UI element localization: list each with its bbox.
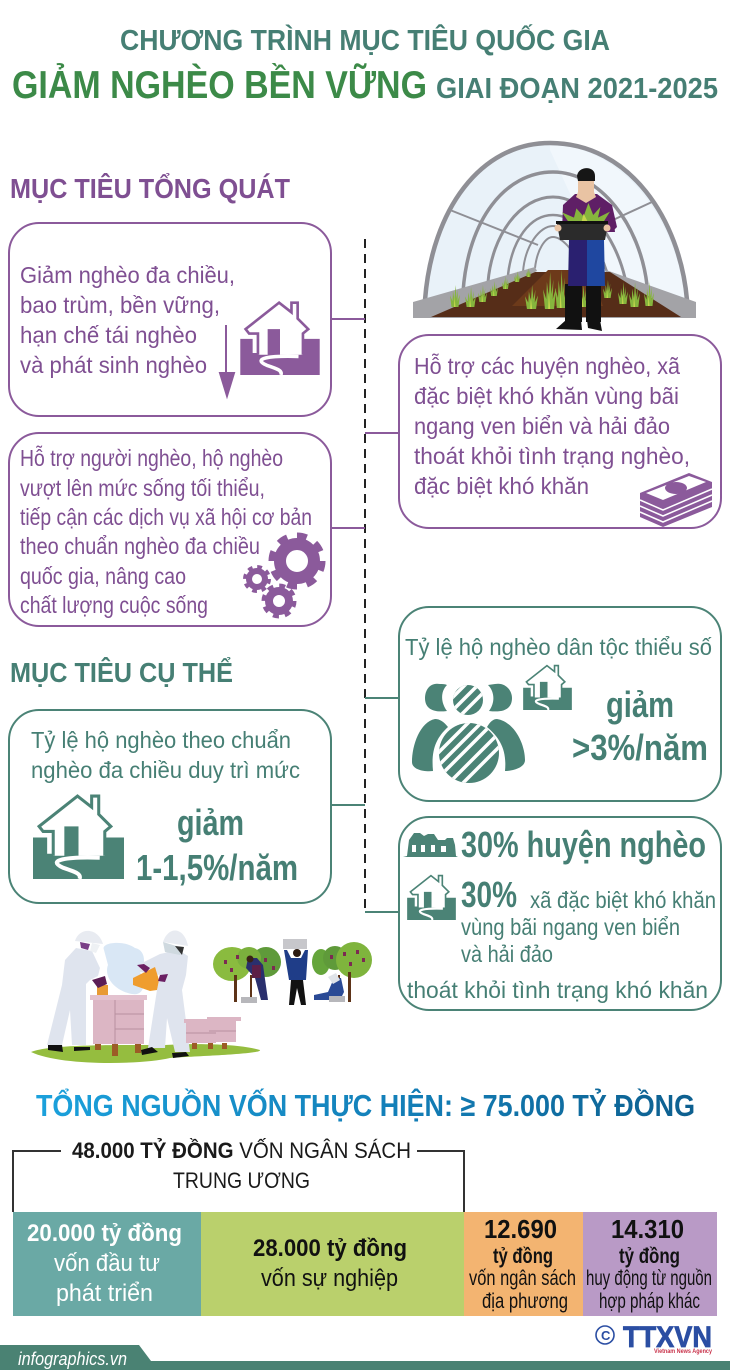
icon: gears	[245, 536, 322, 616]
panel: poverty rate target	[9, 710, 331, 903]
heading: specific objectives: MỤC TIÊU CỤ THỂ	[10, 657, 233, 688]
bar segment: local budget: 12.690	[484, 1214, 557, 1244]
bar segment: local budget: địa phương	[482, 1290, 568, 1313]
panel: poor districts target: và hải đảo	[461, 941, 553, 967]
panel: support poor districts: đặc biệt khó khăn vùng bãi	[414, 383, 679, 409]
panel: support poor districts: Hỗ trợ các huyện nghèo, xã	[414, 353, 681, 379]
panel: reduce poverty: Giảm nghèo đa chiều,	[20, 262, 235, 288]
panel: reduce poverty: bao trùm, bền vững,	[20, 292, 220, 318]
illustration: orchard workers	[213, 939, 372, 1005]
panel: poverty rate target: giảm	[177, 802, 244, 843]
icon: small house	[407, 876, 456, 920]
panel: support poor districts: ngang ven biển và hải đảo	[414, 413, 670, 439]
bar segment: local budget: vốn ngân sách	[469, 1267, 576, 1290]
panel: support poor households: chất lượng cuộc sống	[20, 592, 208, 618]
panel: support poor districts: đặc biệt khó khăn	[414, 473, 589, 499]
logo: TTXVN	[596, 1321, 713, 1355]
panel: ethnic minority target	[399, 607, 721, 801]
title: programme name: CHƯƠNG TRÌNH MỤC TIÊU QUỐC GIA	[120, 23, 610, 57]
panel: poverty rate target: Tỷ lệ hộ nghèo theo chuẩn	[31, 727, 291, 753]
panel: poverty rate target: 1-1,5%/năm	[136, 847, 298, 888]
bar segment: investment capital	[13, 1212, 201, 1316]
panel: ethnic minority target: Tỷ lệ hộ nghèo dân tộc thiểu số	[405, 634, 712, 660]
panel: support poor households: theo chuẩn nghèo đa chiều	[20, 533, 260, 559]
footer band	[0, 1345, 730, 1370]
icon: money stack	[640, 473, 712, 527]
bar segment: investment capital: phát triển	[56, 1280, 153, 1307]
icon: small house	[523, 666, 572, 710]
panel: support poor districts	[399, 335, 721, 528]
panel: support poor households: vượt lên mức sống tối thiểu,	[20, 475, 265, 501]
panel: poor districts target: vùng bãi ngang ven biển	[461, 914, 680, 940]
illustration: beekeepers	[31, 930, 260, 1063]
logo: TTXVN: C	[601, 1328, 611, 1343]
bar segment: local budget: tỷ đồng	[493, 1245, 553, 1268]
logo: TTXVN: Vietnam News Agency	[654, 1349, 713, 1355]
icon: town	[403, 833, 458, 857]
panel: ethnic minority target: giảm	[606, 684, 674, 725]
panel: support poor households	[9, 433, 331, 626]
panel: support poor households: Hỗ trợ người nghèo, hộ nghèo	[20, 445, 283, 471]
illustration: farmer in greenhouse	[413, 143, 696, 331]
panel: support poor households: tiếp cận các dịch vụ xã hội cơ bản	[20, 504, 312, 530]
icon: down arrow	[220, 325, 234, 396]
bar segment: investment capital: vốn đầu tư	[54, 1250, 160, 1277]
bar segment: investment capital: 20.000 tỷ đồng	[27, 1220, 182, 1247]
panel: poor districts target: thoát khỏi tình trạng khó khăn	[407, 977, 708, 1003]
title: programme name	[12, 23, 718, 107]
bracket: central budget: TRUNG ƯƠNG	[173, 1168, 310, 1193]
footer band: infographics.vn	[18, 1349, 127, 1369]
bar segment: other sources	[583, 1212, 717, 1316]
bar segment: other sources: 14.310	[611, 1214, 684, 1244]
connector timeline	[331, 239, 399, 912]
panel: support poor households: quốc gia, nâng cao	[20, 563, 186, 589]
bar segment: local budget	[464, 1212, 583, 1316]
icon: house	[240, 303, 320, 375]
panel: poverty rate target: nghèo đa chiều duy trì mức	[31, 757, 300, 783]
panel: reduce poverty	[9, 223, 331, 416]
panel: reduce poverty: và phát sinh nghèo	[20, 352, 207, 378]
panel: poor districts target	[399, 817, 721, 1010]
icon: people	[412, 680, 525, 784]
title: programme name: GIẢM NGHÈO BỀN VỮNG	[12, 63, 427, 107]
bar segment: recurrent capital: vốn sự nghiệp	[261, 1265, 398, 1292]
bracket: central budget	[13, 1137, 464, 1212]
heading: general objectives: MỤC TIÊU TỔNG QUÁT	[10, 173, 290, 204]
bar segment: recurrent capital	[201, 1212, 464, 1316]
panel: reduce poverty: hạn chế tái nghèo	[20, 322, 197, 348]
panel: poor districts target: 30%	[461, 874, 517, 915]
bracket: central budget: 48.000 TỶ ĐỒNG VỐN NGÂN SÁCH	[72, 1137, 411, 1163]
panel: ethnic minority target: >3%/năm	[572, 727, 708, 768]
title: programme name: GIAI ĐOẠN 2021-2025	[436, 73, 718, 105]
panel: support poor districts: thoát khỏi tình trạng nghèo,	[414, 443, 690, 469]
icon: house	[33, 796, 124, 879]
logo: TTXVN: TTXVN	[623, 1321, 712, 1354]
bar segment: recurrent capital: 28.000 tỷ đồng	[253, 1235, 407, 1262]
bar segment: other sources: tỷ đồng	[619, 1245, 680, 1268]
